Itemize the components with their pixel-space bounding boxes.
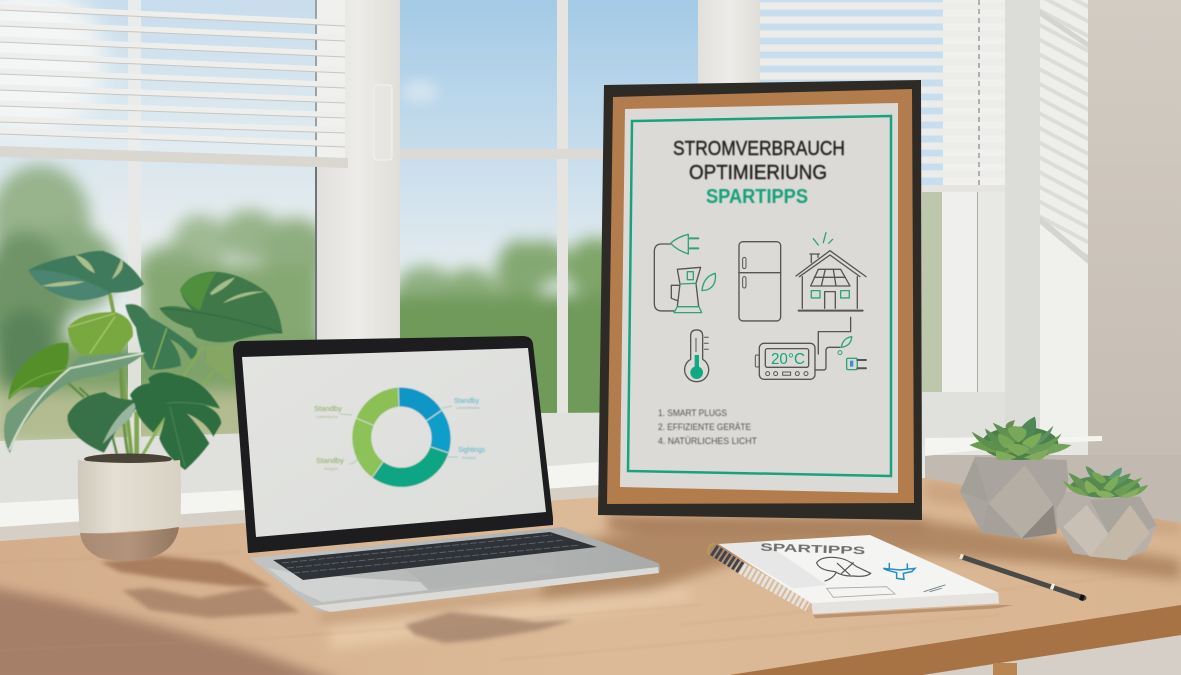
geometric pot small with succulent <box>1057 466 1157 560</box>
desk front edge <box>729 605 1181 675</box>
laptop base <box>250 527 660 611</box>
chart labels: Analyse <box>324 466 339 471</box>
wood grain <box>0 552 1181 660</box>
shadow of plant pot <box>100 556 272 587</box>
trackpad <box>407 558 560 589</box>
succulent large <box>969 417 1072 460</box>
left window view: sky and trees <box>0 0 330 447</box>
notebook title: SPARTIPPS <box>760 542 865 557</box>
notebook spiral binding <box>708 544 808 606</box>
chart labels: Standby <box>454 396 479 405</box>
chart labels: Lastenkurve <box>316 414 339 419</box>
desk top <box>0 478 1181 675</box>
notebook sketches <box>817 557 945 597</box>
laptop <box>233 336 660 612</box>
lower right leaf <box>130 372 221 470</box>
top left leaf <box>28 251 144 300</box>
icon: refrigerator <box>739 242 781 321</box>
sunlit wall stripe <box>1040 0 1088 436</box>
poster title <box>673 138 845 208</box>
monstera plant <box>4 251 283 470</box>
chart labels: Sightings <box>458 445 485 454</box>
icon: thermometer <box>685 330 709 382</box>
stems <box>67 295 213 457</box>
screen <box>242 348 546 537</box>
middle window view: sky and trees <box>400 0 698 413</box>
cork board <box>607 89 914 504</box>
chart labels: Standby <box>316 456 344 465</box>
shadow of plant leaves <box>122 586 575 643</box>
left pale leaf <box>4 353 146 453</box>
left big leaf <box>8 343 69 400</box>
frame outer <box>598 80 922 520</box>
chart labels <box>314 396 485 471</box>
geometric pot large with succulent <box>960 417 1072 539</box>
succulent small <box>1063 466 1148 498</box>
right window view <box>922 190 979 392</box>
lower left leaf <box>68 392 138 453</box>
icon: thermostat 20°C: 20°C <box>771 351 805 368</box>
plant pot <box>78 454 181 561</box>
notebook page <box>718 535 998 603</box>
icon: plug with kettle and leaf <box>654 234 715 313</box>
right blinds <box>760 0 1005 192</box>
back right pale leaf <box>207 344 233 387</box>
wood shadow bands <box>0 480 1181 675</box>
spiral notebook <box>708 535 1013 618</box>
poster list: 2. EFFIZIENTE GERÄTE <box>658 422 751 433</box>
icon: thermostat 20°C <box>755 317 866 379</box>
window sill <box>0 392 1181 541</box>
poster title: SPARTIPPS <box>706 186 808 208</box>
chart segment <box>356 387 399 426</box>
keyboard <box>273 532 597 580</box>
poster list: 1. SMART PLUGS <box>658 408 727 419</box>
left blinds <box>0 0 348 168</box>
chart labels: Standby <box>314 404 342 413</box>
pencil <box>960 556 1084 598</box>
poster icons <box>654 233 866 382</box>
poster title: OPTIMIERIUNG <box>689 162 827 184</box>
screen lid <box>233 336 553 553</box>
poster paper <box>620 103 898 493</box>
poster in cork frame <box>598 80 922 520</box>
poster list <box>658 408 757 447</box>
sunlit patch on base <box>268 568 428 602</box>
mid light leaf <box>68 312 133 358</box>
mid right leaf <box>125 304 197 370</box>
donut chart <box>352 387 451 487</box>
poster title: STROMVERBRAUCH <box>673 138 845 160</box>
notebook shadow <box>813 605 1013 618</box>
chart labels: Laufzeitdaten <box>456 405 480 410</box>
window frames and muntins <box>128 0 1005 470</box>
poster list: 4. NATÜRLICHES LICHT <box>658 436 757 447</box>
icon: house with solar panels <box>796 233 866 311</box>
top right leaf <box>159 272 283 342</box>
green border <box>628 116 891 476</box>
chart labels: Analyse <box>462 455 477 460</box>
notebook thickness <box>812 593 999 614</box>
